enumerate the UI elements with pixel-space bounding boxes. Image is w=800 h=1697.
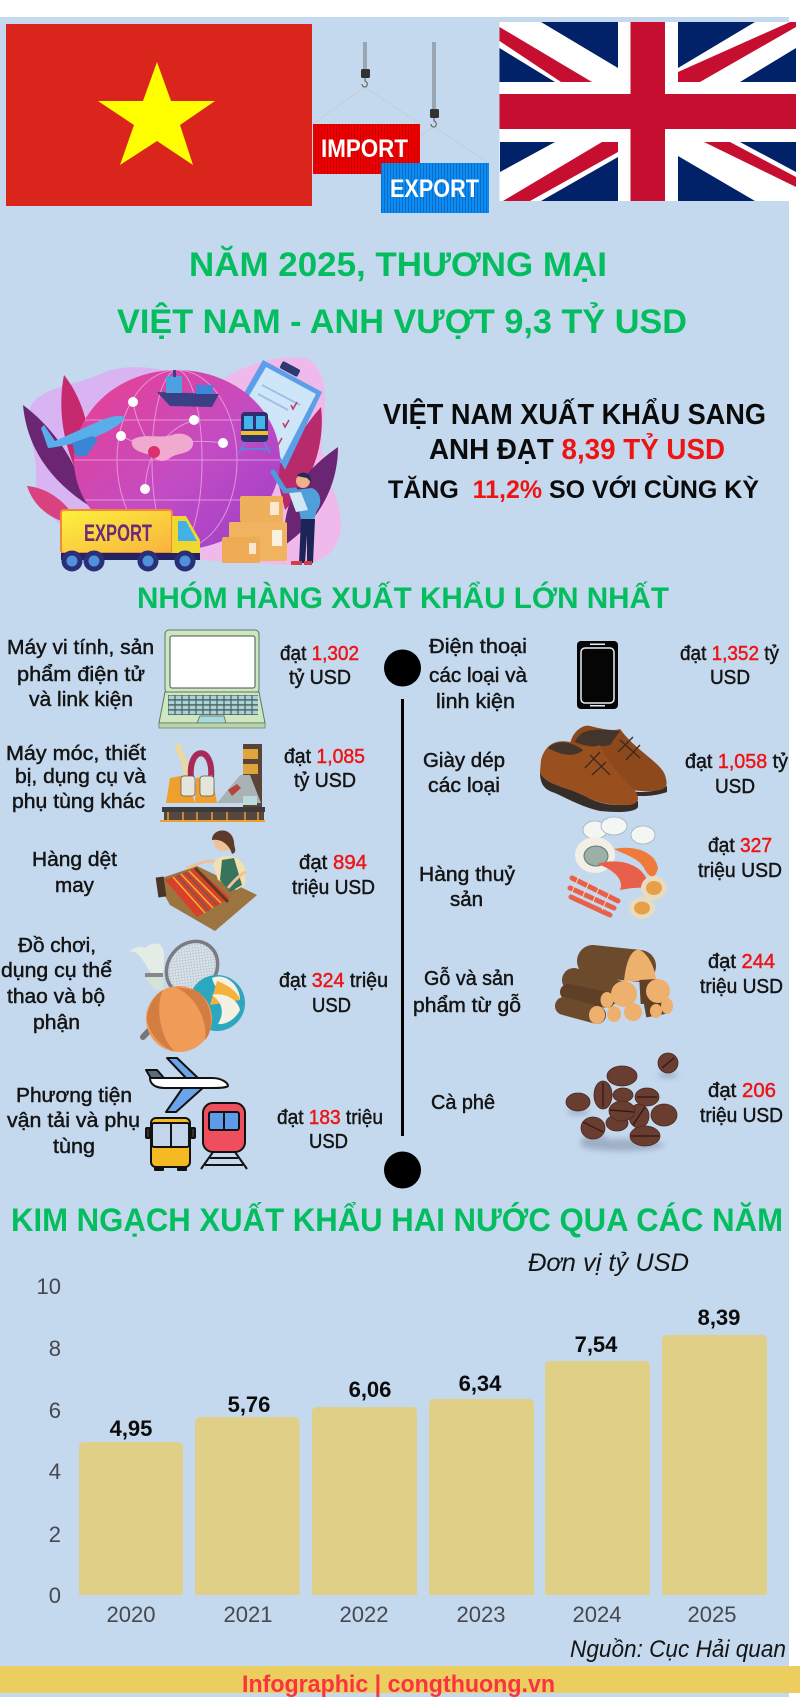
flag: United Kingdom xyxy=(500,22,796,201)
value labels: 6,34 xyxy=(459,1371,502,1396)
item: computers: phẩm điện tử xyxy=(17,664,145,686)
item: vehicles and parts: Phương tiện xyxy=(16,1085,132,1107)
item: seafood: đạt 327 xyxy=(708,835,772,857)
icon: plane, bus and train xyxy=(146,1058,247,1170)
item: footwear: Giày dép xyxy=(423,750,505,772)
item: vehicles and parts xyxy=(7,1058,383,1170)
value labels: 4,95 xyxy=(110,1416,152,1441)
icon: smartphone xyxy=(577,641,618,709)
y axis labels: 8 xyxy=(49,1336,61,1361)
item: footwear: đạt 1,058 tỷ xyxy=(685,751,788,773)
item: toys and sports gear: thao và bộ xyxy=(7,986,105,1008)
x axis labels: 2022 xyxy=(340,1602,388,1627)
x axis labels: 2020 xyxy=(107,1602,155,1627)
y axis labels: 0 xyxy=(49,1583,61,1608)
item: machinery: đạt 1,085 xyxy=(284,746,365,768)
icon: import and export containers on crane hooks xyxy=(313,42,489,213)
item: wood xyxy=(413,950,783,1024)
footer band xyxy=(0,1666,800,1697)
item: vehicles and parts: USD xyxy=(309,1131,348,1153)
icon: oysters and shrimp xyxy=(570,817,667,919)
x axis labels: 2025 xyxy=(688,1602,736,1627)
icon: brown shoes xyxy=(540,726,667,812)
icon: woman at loom xyxy=(156,830,257,931)
item: machinery: Máy móc, thiết xyxy=(6,743,146,765)
callout: Vietnam exports to the UK xyxy=(383,397,766,504)
item: toys and sports gear: Đồ chơi, xyxy=(18,935,96,957)
x axis labels: 2024 xyxy=(573,1602,621,1627)
item: toys and sports gear: phận xyxy=(33,1012,80,1034)
item: toys and sports gear: dụng cụ thể xyxy=(1,960,112,982)
item: wood: Gỗ và sản xyxy=(424,967,514,990)
item: machinery: phụ tùng khác xyxy=(12,791,145,813)
item: computers: Máy vi tính, sản xyxy=(7,637,154,659)
source note: Nguồn: Cục Hải quan xyxy=(570,1636,786,1663)
item: footwear: các loại xyxy=(428,775,500,797)
item: vehicles and parts: vận tải và phụ xyxy=(7,1110,140,1132)
item: seafood: Hàng thuỷ xyxy=(419,864,515,886)
title: VIỆT NAM - ANH VƯỢT 9,3 TỶ USD xyxy=(117,303,687,341)
callout: Vietnam exports to the UK: ANH ĐẠT 8,39 TỶ USD xyxy=(429,432,725,466)
item: textiles: đạt 894 xyxy=(299,852,367,874)
unit note: Đơn vị tỷ USD xyxy=(528,1249,689,1277)
item: textiles: may xyxy=(55,875,94,897)
y axis labels: 2 xyxy=(49,1522,61,1547)
item: phones: USD xyxy=(710,667,750,689)
value labels: 5,76 xyxy=(228,1392,270,1417)
value labels: 6,06 xyxy=(349,1377,391,1402)
value labels xyxy=(110,1305,740,1441)
item: machinery: bị, dụng cụ và xyxy=(15,766,147,788)
y axis labels: 4 xyxy=(49,1459,61,1484)
callout: Vietnam exports to the UK: TĂNG 11,2% SO VỚI CÙNG KỲ xyxy=(388,474,759,504)
item: computers: đạt 1,302 xyxy=(280,643,359,665)
callout: Vietnam exports to the UK: VIỆT NAM XUẤT KHẨU SANG xyxy=(383,397,766,431)
illustration: global export logistics xyxy=(23,357,341,571)
item: coffee: đạt 206 xyxy=(708,1080,776,1102)
value labels: 7,54 xyxy=(575,1332,618,1357)
heading: largest export groups: NHÓM HÀNG XUẤT KHẨU LỚN NHẤT xyxy=(137,581,669,615)
item: phones: Điện thoại xyxy=(429,636,527,658)
item: coffee xyxy=(431,1053,783,1151)
illustration: global export logistics: EXPORT xyxy=(84,520,152,547)
x axis labels: 2021 xyxy=(224,1602,272,1627)
title: NĂM 2025, THƯƠNG MẠI xyxy=(189,246,607,284)
item: wood: phẩm từ gỗ xyxy=(413,994,521,1017)
item: machinery: tỷ USD xyxy=(294,770,356,792)
item: coffee: Cà phê xyxy=(431,1092,495,1114)
y axis labels: 6 xyxy=(49,1398,61,1423)
icon: import and export containers on crane hooks: IMPORT xyxy=(321,135,408,163)
bars xyxy=(79,1335,767,1595)
item: footwear xyxy=(423,726,788,812)
item: seafood: triệu USD xyxy=(698,860,782,882)
flag: Vietnam xyxy=(6,24,312,206)
y axis labels: 10 xyxy=(37,1274,61,1299)
icon: sports equipment xyxy=(129,931,245,1052)
item: vehicles and parts: tùng xyxy=(53,1136,95,1158)
item: computers: và link kiện xyxy=(29,689,133,711)
icon: factory machine xyxy=(160,744,265,822)
item: toys and sports gear: đạt 324 triệu xyxy=(279,970,388,992)
item: wood: đạt 244 xyxy=(708,951,775,973)
item: toys and sports gear xyxy=(1,931,388,1052)
item: toys and sports gear: USD xyxy=(312,995,351,1017)
item: wood: triệu USD xyxy=(700,976,783,998)
item: computers: tỷ USD xyxy=(289,667,351,689)
x axis labels xyxy=(107,1602,736,1627)
item: textiles: Hàng dệt xyxy=(32,849,117,871)
y axis labels xyxy=(37,1274,61,1608)
item: seafood: sản xyxy=(450,889,483,911)
icon: import and export containers on crane hooks: EXPORT xyxy=(390,175,479,203)
timeline divider xyxy=(384,650,421,1188)
bar chart xyxy=(37,1274,767,1627)
item: textiles xyxy=(32,830,375,931)
item: phones: linh kiện xyxy=(436,691,515,713)
heading: export turnover by year: KIM NGẠCH XUẤT KHẨU HAI NƯỚC QUA CÁC NĂM xyxy=(11,1202,783,1238)
item: textiles: triệu USD xyxy=(292,877,375,899)
item: machinery xyxy=(6,743,365,822)
x axis labels: 2023 xyxy=(457,1602,505,1627)
item: coffee: triệu USD xyxy=(700,1105,783,1127)
item: footwear: USD xyxy=(715,776,755,798)
item: seafood xyxy=(419,817,782,919)
item: phones xyxy=(429,636,779,713)
icon: coffee beans xyxy=(566,1053,678,1151)
icon: laptop xyxy=(159,630,265,728)
value labels: 8,39 xyxy=(698,1305,740,1330)
icon: stacked logs xyxy=(564,950,673,1024)
item: computers xyxy=(7,630,359,728)
title xyxy=(117,246,687,341)
item: phones: các loại và xyxy=(429,665,528,687)
item: phones: đạt 1,352 tỷ xyxy=(680,643,779,665)
item: vehicles and parts: đạt 183 triệu xyxy=(277,1107,383,1129)
